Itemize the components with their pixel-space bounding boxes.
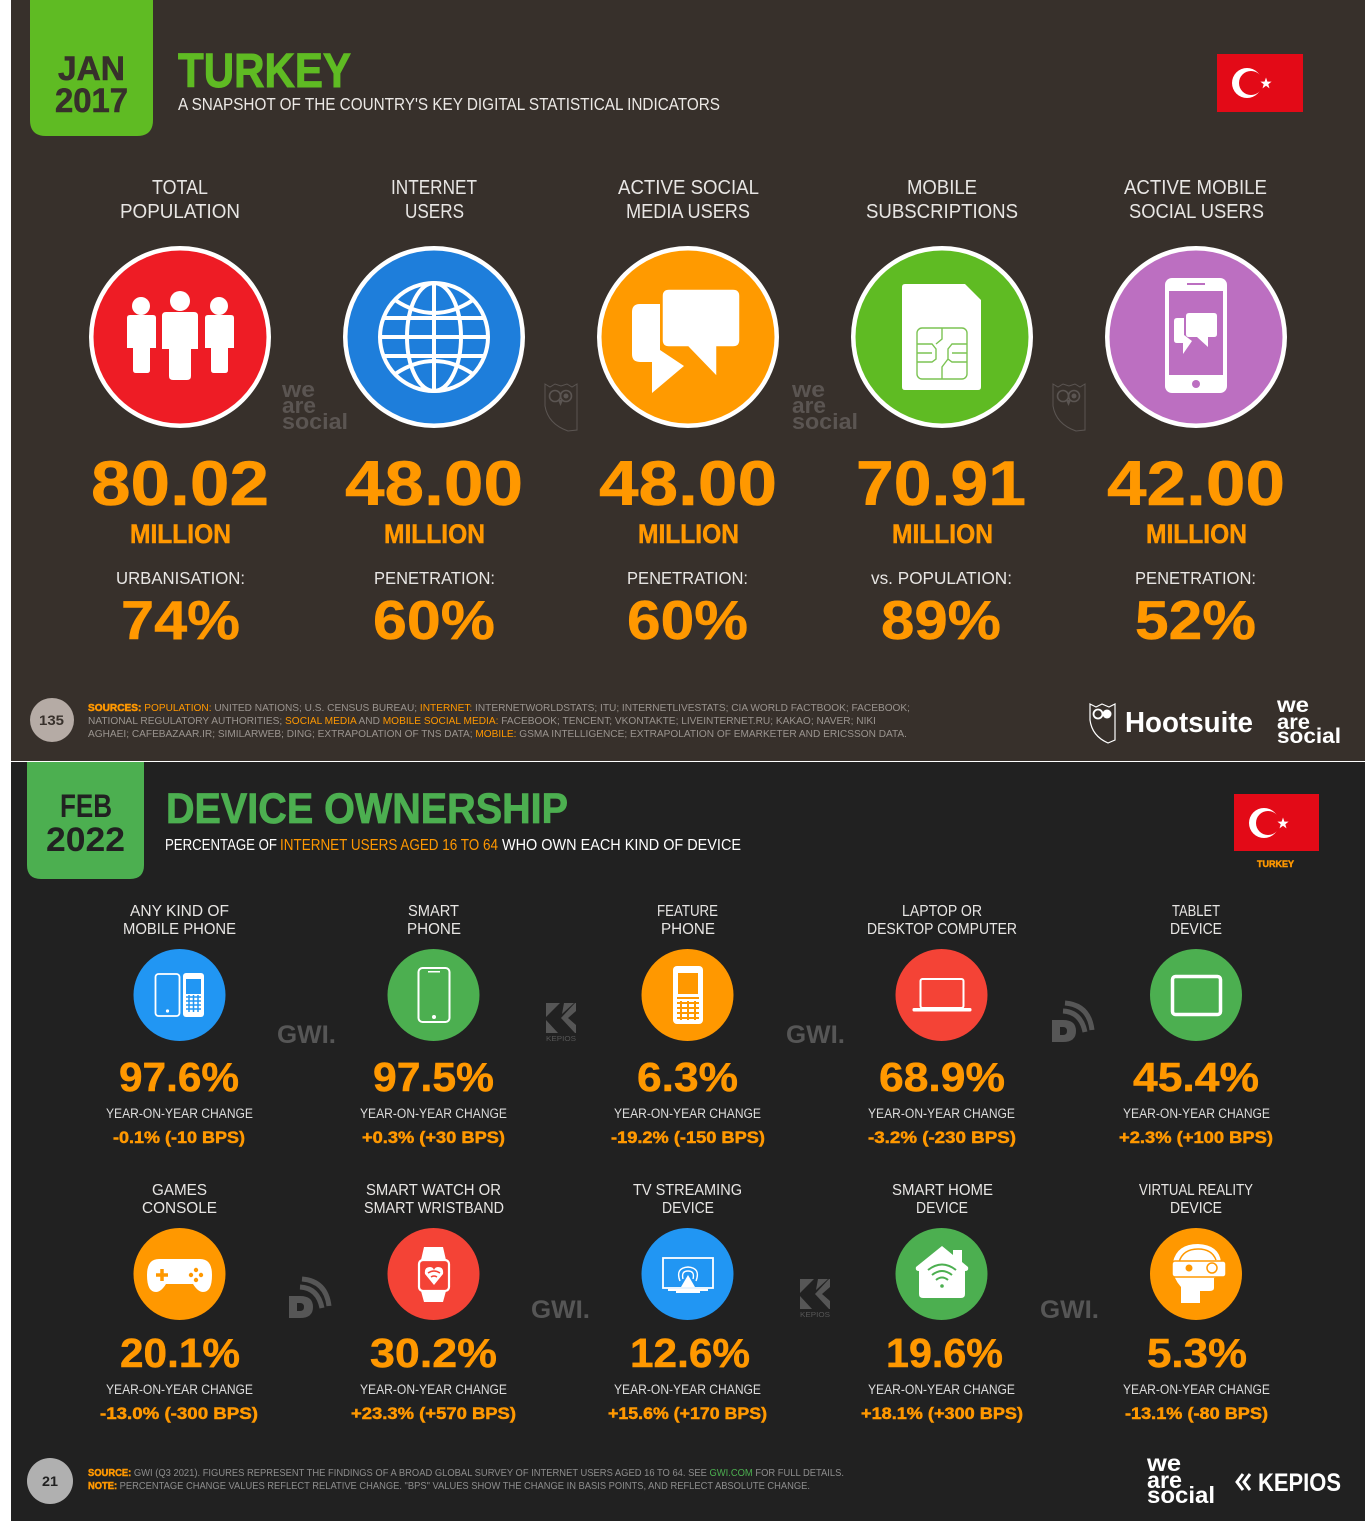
column: total population	[89, 177, 271, 651]
label	[892, 1182, 993, 1217]
label: DEVICE	[916, 1200, 968, 1217]
sources text	[88, 702, 910, 740]
icon: smartphone	[388, 949, 480, 1041]
column: mobile subscriptions	[851, 177, 1033, 651]
label: SMART WATCH OR	[366, 1182, 501, 1199]
logo: Hootsuite	[1090, 704, 1253, 743]
label	[866, 177, 1018, 223]
watermark: owl	[545, 384, 577, 431]
year-on-year label: YEAR-ON-YEAR CHANGE	[360, 1382, 507, 1397]
item: laptop or desktop computer	[867, 903, 1017, 1147]
unit: MILLION	[638, 519, 739, 549]
panel: Turkey snapshot 2017	[30, 0, 1341, 748]
date badge: Feb 2022	[27, 762, 144, 879]
label: SMART WRISTBAND	[364, 1200, 504, 1217]
subtitle: A SNAPSHOT OF THE COUNTRY'S KEY DIGITAL STATISTICAL INDICATORS	[178, 94, 720, 114]
sources text: SOURCES: POPULATION: UNITED NATIONS; U.S. CENSUS BUREAU; INTERNET: INTERNETWORLDSTATS; ITU; INTERNETLIVESTATS; CIA WORLD FACTBOOK; FACEBOOK;	[88, 702, 910, 714]
percentage: 60%	[373, 589, 495, 651]
label: LAPTOP OR	[902, 903, 982, 920]
sub label: vs. POPULATION:	[871, 568, 1012, 588]
watermark: DataReportal	[1052, 1003, 1092, 1042]
page number 21: 21	[42, 1473, 58, 1489]
unit: MILLION	[130, 519, 231, 549]
change: +2.3% (+100 BPS)	[1119, 1128, 1273, 1147]
value: 12.6%	[630, 1330, 750, 1376]
icon: smartphone with chat	[1105, 246, 1287, 428]
watermark: DataReportal	[289, 1279, 329, 1318]
change: +18.1% (+300 BPS)	[861, 1404, 1023, 1423]
value: 30.2%	[370, 1330, 497, 1376]
label: TABLET	[1172, 903, 1220, 920]
value: 6.3%	[637, 1054, 738, 1100]
icon: smart watch	[388, 1228, 480, 1320]
sub label: PENETRATION:	[374, 568, 495, 588]
unit: MILLION	[384, 519, 485, 549]
label: DEVICE	[662, 1200, 714, 1217]
label	[618, 177, 759, 223]
source and note text: NOTE: PERCENTAGE CHANGE VALUES REFLECT RELATIVE CHANGE. "BPS" VALUES SHOW THE CHANGE IN BASIS POINTS, AND REFLECT ABSOLUTE CHANGE.	[88, 1480, 810, 1492]
sub label: URBANISATION:	[116, 568, 245, 588]
watermark: we are social: are	[282, 393, 316, 418]
watermark: we are social: social	[792, 409, 858, 434]
label	[123, 903, 236, 938]
label: ACTIVE SOCIAL	[618, 177, 759, 199]
label: SUBSCRIPTIONS	[866, 201, 1018, 223]
label	[1124, 177, 1267, 223]
value: 45.4%	[1133, 1054, 1259, 1100]
unit: MILLION	[892, 519, 993, 549]
watermark: we are social: we	[791, 377, 825, 402]
logo: Kepios: KEPIOS	[1258, 1469, 1341, 1497]
background: lower slide	[11, 762, 1365, 1521]
icon: VR headset	[1150, 1228, 1242, 1320]
value: 97.6%	[119, 1054, 239, 1100]
label: MOBILE PHONE	[123, 921, 236, 938]
watermark: GWI: GWI.	[786, 1021, 845, 1049]
year-on-year label: YEAR-ON-YEAR CHANGE	[1123, 1106, 1270, 1121]
label	[1170, 903, 1222, 938]
subtitle: WHO OWN EACH KIND OF DEVICE	[502, 837, 741, 854]
column: active mobile social users	[1105, 177, 1287, 651]
flag caption: TURKEY	[1257, 859, 1295, 870]
watermark: GWI: GWI.	[1040, 1296, 1099, 1324]
watermark: we are social: social	[282, 409, 348, 434]
icon: TV streaming	[642, 1228, 734, 1320]
date badge: Jan 2017: JAN	[58, 50, 125, 88]
background: upper slide	[11, 0, 1365, 761]
title: device ownership: DEVICE OWNERSHIP	[166, 785, 568, 833]
logo: Hootsuite: Hootsuite	[1125, 707, 1253, 739]
watermark: we are social: we	[281, 377, 315, 402]
label: INTERNET	[391, 177, 477, 199]
value: 70.91	[856, 449, 1026, 519]
item: TV streaming device	[608, 1182, 767, 1423]
label: ACTIVE MOBILE	[1124, 177, 1267, 199]
label	[407, 903, 461, 938]
label	[142, 1182, 217, 1217]
value: 42.00	[1107, 449, 1285, 519]
item: smart watch or wristband	[351, 1182, 516, 1423]
value: 68.9%	[879, 1054, 1005, 1100]
subtitle: PERCENTAGE OF	[165, 837, 277, 854]
change: -13.0% (-300 BPS)	[100, 1404, 258, 1423]
column: active social media users	[597, 177, 779, 651]
year-on-year label: YEAR-ON-YEAR CHANGE	[360, 1106, 507, 1121]
label: MOBILE	[907, 177, 977, 199]
column: internet users	[343, 177, 525, 651]
year-on-year label: YEAR-ON-YEAR CHANGE	[614, 1106, 761, 1121]
label: TV STREAMING	[633, 1182, 742, 1199]
item: virtual reality device	[1123, 1182, 1270, 1423]
label: PHONE	[661, 921, 715, 938]
label	[120, 177, 240, 223]
item: smart phone	[360, 903, 507, 1147]
subtitle	[165, 837, 741, 854]
logo: we are social: are	[1147, 1467, 1182, 1493]
logo: we are social: social	[1147, 1482, 1215, 1508]
sources text: NATIONAL REGULATORY AUTHORITIES; SOCIAL MEDIA AND MOBILE SOCIAL MEDIA: FACEBOOK; TENCENT; VKONTAKTE; LIVEINTERNET.RU; KAKAO; NAVER; NIKI	[88, 715, 876, 727]
watermark: Kepios	[800, 1279, 830, 1319]
label: DEVICE	[1170, 921, 1222, 938]
label: DESKTOP COMPUTER	[867, 921, 1017, 938]
label: SMART	[408, 903, 459, 920]
year-on-year label: YEAR-ON-YEAR CHANGE	[106, 1106, 253, 1121]
watermark: we are social: are	[792, 393, 826, 418]
percentage: 60%	[627, 589, 748, 651]
item: tablet device	[1119, 903, 1273, 1147]
page number 135: 135	[39, 712, 64, 728]
title: Turkey: TURKEY	[178, 45, 351, 98]
percentage: 74%	[121, 589, 240, 651]
label	[391, 177, 477, 223]
percentage: 52%	[1135, 589, 1256, 651]
icon: game controller	[134, 1228, 226, 1320]
logo: we are social: we	[1276, 694, 1309, 717]
change: +0.3% (+30 BPS)	[362, 1128, 505, 1147]
icon: Turkish flag	[1234, 794, 1319, 851]
label: ANY KIND OF	[130, 903, 229, 920]
label: MEDIA USERS	[626, 201, 750, 223]
item: smart home device	[861, 1182, 1023, 1423]
label	[657, 903, 718, 938]
icon: laptop	[896, 949, 988, 1041]
logo: we are social	[1146, 1450, 1215, 1508]
sub label: PENETRATION:	[1135, 568, 1256, 588]
label	[364, 1182, 504, 1217]
item: any kind of mobile phone	[106, 903, 253, 1147]
change: -0.1% (-10 BPS)	[113, 1128, 245, 1147]
year-on-year label: YEAR-ON-YEAR CHANGE	[614, 1382, 761, 1397]
year-on-year label: YEAR-ON-YEAR CHANGE	[868, 1382, 1015, 1397]
label	[1139, 1182, 1253, 1217]
watermark: we are social	[791, 377, 858, 434]
sources text: AGHAEI; CAFEBAZAAR.IR; SIMILARWEB; DING; EXTRAPOLATION OF TNS DATA; MOBILE: GSMA INTELLIGENCE; EXTRAPOLATION OF EMARKETER AND ERICSSON DATA.	[88, 728, 907, 740]
date badge: Feb 2022: FEB	[60, 788, 112, 824]
year-on-year label: YEAR-ON-YEAR CHANGE	[1123, 1382, 1270, 1397]
source and note text	[88, 1467, 844, 1492]
unit: MILLION	[1146, 519, 1247, 549]
logo: we are social: are	[1277, 711, 1310, 734]
value: 19.6%	[886, 1330, 1003, 1376]
value: 20.1%	[120, 1330, 240, 1376]
icon: Turkish flag	[1217, 54, 1303, 112]
year-on-year label: YEAR-ON-YEAR CHANGE	[868, 1106, 1015, 1121]
logo: we are social: we	[1146, 1450, 1181, 1476]
source and note text: SOURCE: GWI (Q3 2021). FIGURES REPRESENT THE FINDINGS OF A BROAD GLOBAL SURVEY OF INTERNET USERS AGED 16 TO 64. SEE GWI.COM FOR FULL DETAILS.	[88, 1467, 844, 1479]
label: FEATURE	[657, 903, 718, 920]
change: +23.3% (+570 BPS)	[351, 1404, 516, 1423]
icon: feature phone	[642, 949, 734, 1041]
label: PHONE	[407, 921, 461, 938]
value: 48.00	[345, 449, 523, 519]
year-on-year label: YEAR-ON-YEAR CHANGE	[106, 1382, 253, 1397]
label: GAMES	[152, 1182, 207, 1199]
change: -19.2% (-150 BPS)	[611, 1128, 765, 1147]
item: feature phone	[611, 903, 765, 1147]
value: 5.3%	[1147, 1330, 1247, 1376]
date badge: Jan 2017	[30, 0, 153, 136]
icon: globe	[343, 246, 525, 428]
label: TOTAL	[152, 177, 208, 199]
subtitle: INTERNET USERS AGED 16 TO 64	[280, 837, 498, 854]
label	[867, 903, 1017, 938]
label: SMART HOME	[892, 1182, 993, 1199]
value: 97.5%	[373, 1054, 494, 1100]
watermark: Kepios	[546, 1003, 576, 1043]
label: POPULATION	[120, 201, 240, 223]
icon: tablet	[1150, 949, 1242, 1041]
date badge: Feb 2022: 2022	[46, 821, 125, 859]
change: +15.6% (+170 BPS)	[608, 1404, 767, 1423]
change: -13.1% (-80 BPS)	[1125, 1404, 1268, 1423]
icon: smart home	[896, 1228, 988, 1320]
percentage: 89%	[881, 589, 1001, 651]
page number 135	[30, 698, 74, 742]
value: 48.00	[599, 449, 777, 519]
watermark: we are social	[281, 377, 348, 434]
logo: we are social	[1276, 694, 1341, 748]
watermark: GWI: GWI.	[277, 1021, 336, 1049]
label: SOCIAL USERS	[1129, 201, 1264, 223]
icon: people	[89, 246, 271, 428]
item: games console	[100, 1182, 258, 1423]
label: DEVICE	[1170, 1200, 1222, 1217]
change: -3.2% (-230 BPS)	[868, 1128, 1016, 1147]
icon: two phones	[134, 949, 226, 1041]
watermark: GWI: GWI.	[531, 1296, 590, 1324]
icon: SIM card	[851, 246, 1033, 428]
logo: we are social: social	[1277, 725, 1341, 748]
icon: speech bubbles	[597, 246, 779, 428]
value: 80.02	[91, 449, 269, 519]
label: USERS	[405, 201, 464, 223]
page number 21	[27, 1458, 73, 1504]
watermark: owl	[1053, 384, 1085, 431]
panel: device ownership 2022	[27, 762, 1341, 1508]
sub label: PENETRATION:	[627, 568, 748, 588]
date badge: Jan 2017: 2017	[55, 82, 128, 120]
label	[633, 1182, 742, 1217]
label: CONSOLE	[142, 1200, 217, 1217]
label: VIRTUAL REALITY	[1139, 1182, 1253, 1199]
